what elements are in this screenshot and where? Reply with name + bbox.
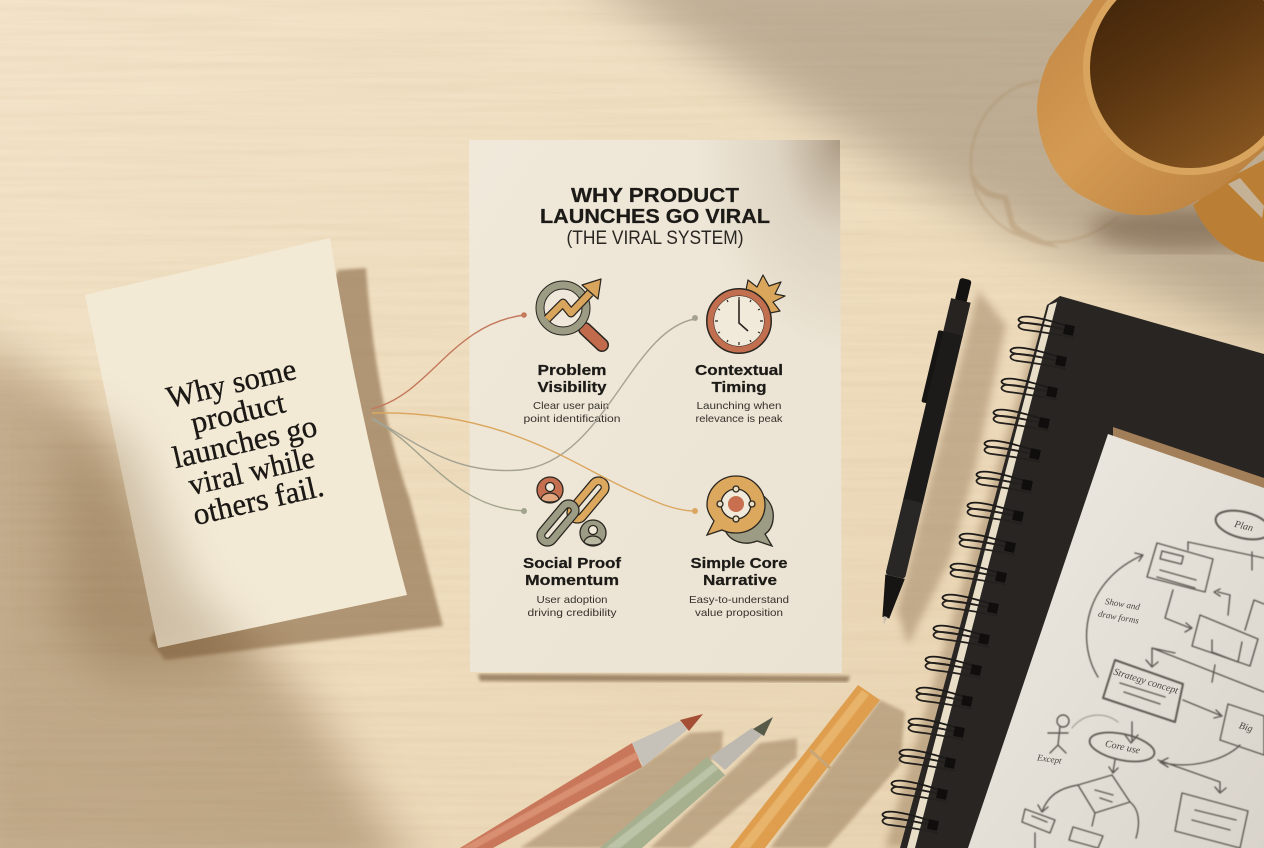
- person: sage: [580, 520, 606, 546]
- connector: orange line to simple core narrative: [372, 413, 698, 514]
- sketch handwriting: Big: [1237, 720, 1254, 735]
- label: problem visibility: point identification: [524, 413, 621, 425]
- pen: [869, 276, 976, 628]
- coffee mug: [1037, 0, 1264, 262]
- mug shadow: [1090, 206, 1264, 250]
- card sheet: [469, 140, 842, 673]
- label: contextual timing: Contextual: [695, 362, 783, 379]
- label: contextual timing: Launching when: [696, 400, 782, 412]
- spiral binding: [883, 317, 1075, 833]
- card question text: viral while: [185, 439, 318, 502]
- sketch handwriting: Core use: [1104, 738, 1142, 757]
- label: social proof momentum: User adoption: [536, 594, 608, 606]
- coffee: [1090, 0, 1264, 168]
- pen grip: [885, 498, 923, 579]
- icon: magnifier with growth arrow: [540, 279, 602, 345]
- chain link: orange: [568, 478, 608, 522]
- title: [540, 185, 770, 249]
- pen barrel: [903, 331, 963, 505]
- title: LAUNCHES GO VIRAL: [540, 206, 770, 228]
- label: simple core narrative: Simple Core: [690, 555, 788, 572]
- label: problem visibility: [524, 362, 621, 425]
- marker: sage: [600, 717, 773, 848]
- label: simple core narrative: value proposition: [695, 607, 783, 619]
- sketch handwriting: Plan: [1232, 519, 1254, 534]
- mug body: [1037, 0, 1264, 215]
- icon: speech bubbles: [707, 476, 773, 546]
- mug handle: [1193, 160, 1264, 262]
- flowchart sketch: [1022, 506, 1264, 848]
- sketch handwriting: Strategy concept: [1112, 667, 1180, 697]
- label: contextual timing: [695, 362, 783, 425]
- card sheet: [85, 238, 407, 648]
- notebook cover: [900, 296, 1264, 848]
- title: WHY PRODUCT: [571, 185, 739, 207]
- label: simple core narrative: Narrative: [703, 572, 777, 589]
- window shadow falling across left card: [60, 400, 260, 680]
- coffee ring stain: [971, 81, 1118, 248]
- card question text: [156, 349, 334, 534]
- label: simple core narrative: Easy-to-understand: [689, 594, 789, 606]
- person: rust: [537, 477, 563, 503]
- pen clip: [921, 330, 944, 403]
- card question text: launches go: [169, 408, 320, 475]
- sketch handwriting: Except: [1036, 752, 1063, 766]
- window shadow: lower left: [0, 335, 420, 848]
- mug rim: [1083, 0, 1264, 175]
- pen tip: [882, 616, 888, 626]
- label: social proof momentum: Momentum: [525, 572, 619, 589]
- cardboard backing: [1113, 427, 1264, 500]
- sketch paper: [968, 434, 1264, 848]
- connector: sage line to social proof: [372, 420, 527, 514]
- mug handle gap: [1228, 178, 1264, 218]
- connector: grey line to contextual timing: [372, 315, 698, 471]
- notebook: [883, 296, 1264, 848]
- card question text: Why some: [163, 351, 299, 415]
- label: contextual timing: relevance is peak: [696, 413, 783, 425]
- left card drop shadow: [150, 268, 443, 660]
- main card: [469, 140, 842, 673]
- connector: rust line to problem visibility: [371, 312, 527, 409]
- pen drop shadow: [897, 290, 1006, 645]
- title: (THE VIRAL SYSTEM): [566, 228, 744, 249]
- icon: clock with burst: [710, 275, 785, 350]
- marker drop shadows: [520, 700, 905, 848]
- pen top button: [955, 278, 972, 304]
- sketch handwriting: Show and: [1104, 596, 1141, 612]
- marker: orange: [730, 685, 880, 848]
- window shadow: upper right: [555, 0, 1264, 350]
- page edge strip: [907, 302, 1057, 848]
- marker: rust: [460, 714, 703, 848]
- card corner shadow: [469, 140, 842, 673]
- sketch handwriting: draw forms: [1097, 609, 1140, 626]
- card question text: others fail.: [189, 468, 327, 532]
- chain link: sage: [538, 501, 578, 545]
- pen cone: [876, 574, 905, 620]
- label: social proof momentum: [523, 555, 622, 619]
- notebook cover shadow: [885, 320, 1060, 848]
- label: social proof momentum: driving credibility: [528, 607, 617, 619]
- label: contextual timing: Timing: [712, 379, 766, 396]
- pen upper knurl: [943, 298, 971, 338]
- sketch handwriting: [1036, 519, 1254, 766]
- icon: chain with people: [537, 477, 608, 546]
- label: problem visibility: Clear user pain: [533, 400, 609, 412]
- label: simple core narrative: [689, 555, 789, 619]
- label: social proof momentum: Social Proof: [523, 555, 622, 572]
- card question text: product: [187, 384, 289, 440]
- left card: [85, 238, 407, 648]
- label: problem visibility: Problem: [538, 362, 606, 379]
- main card drop shadow: [478, 674, 850, 682]
- label: problem visibility: Visibility: [538, 379, 607, 396]
